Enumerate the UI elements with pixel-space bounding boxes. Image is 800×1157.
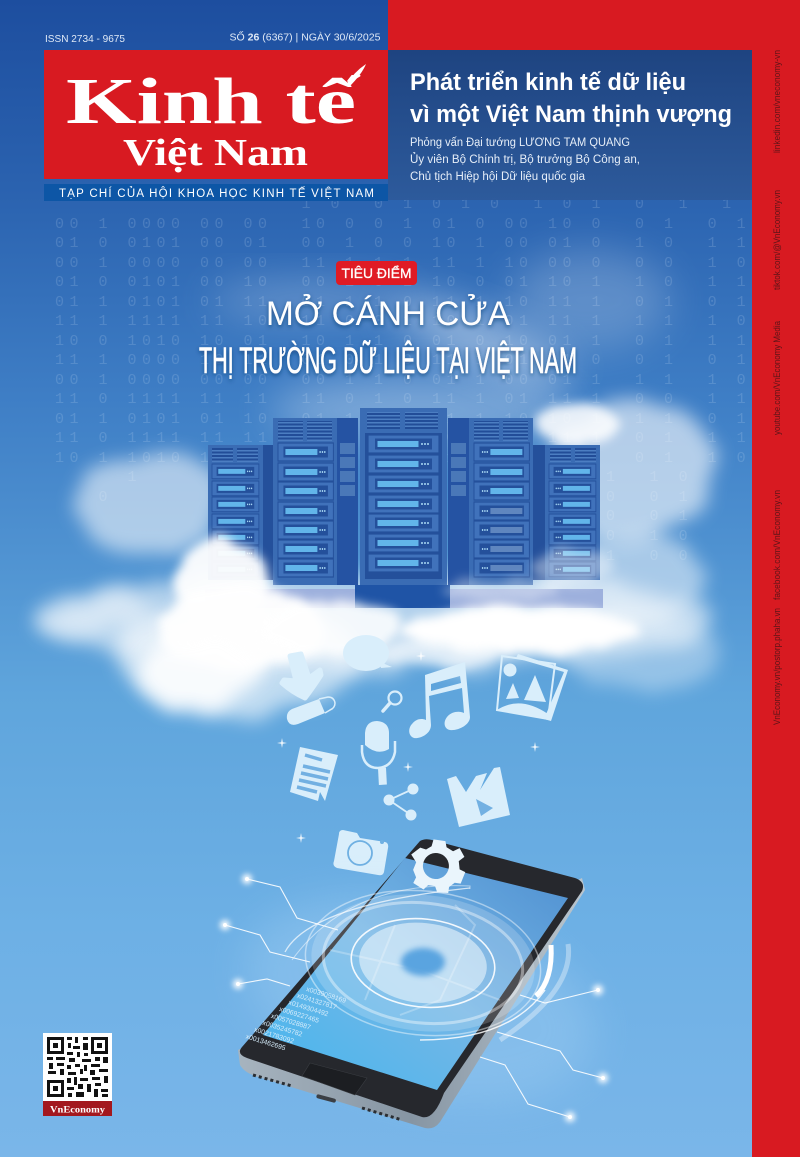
circuit lines with glowing nodes (220, 874, 608, 1122)
side strip social links: VnEconomy.vn/postorp.phaha.vn (772, 608, 783, 725)
qr code with VnEconomy label: VnEconomy (50, 1106, 105, 1116)
binary code rain background: 01 0 0101 00 01 00 1 0 0 10 1 00 01 0 1 0 1 1 (55, 235, 751, 252)
smartphone (222, 839, 618, 1138)
icon: photo stack (497, 654, 568, 721)
rack: inner left (273, 418, 358, 585)
phone screen hex code text: x0069227465 (278, 1006, 320, 1025)
tagline band (44, 184, 388, 201)
binary code rain background: 1 00 1 0 1 0 0 (55, 548, 693, 565)
icon: speech bubble (343, 635, 392, 671)
binary code rain background: 0 10 0 1 0 0 1 (55, 508, 693, 525)
icon: video clapper (447, 767, 510, 827)
logo accent flourish (346, 64, 366, 87)
masthead red logo block (44, 50, 388, 179)
clouds in front of the servers (135, 538, 640, 707)
masthead date line (45, 30, 381, 45)
main title (199, 295, 577, 381)
binary code rain background: 1 0 0 1 0 1 0 1 0 1 0 1 1 (55, 196, 737, 213)
logo: Kinh tế: Kinh tế (66, 65, 361, 138)
panel headline: vì một Việt Nam thịnh vượng (410, 101, 732, 128)
clouds behind the servers (40, 250, 720, 715)
binary code rain background: 10 0 1010 10 01 10 1 1 0 01 0 10 01 1 0 1 1 1 (55, 333, 751, 350)
side strip social links (772, 50, 783, 725)
phone body (240, 839, 583, 1117)
tag: Tiêu điểm: TIÊU ĐIỂM (342, 266, 412, 281)
binary code rain background: 00 1 0000 00 00 11 1 1 1 11 1 10 00 0 0 0 1 0 (55, 255, 751, 272)
main title: MỞ CÁNH CỬA (266, 295, 510, 333)
icon: share (384, 784, 418, 820)
phone screen hex code text (245, 973, 347, 1065)
icon: gear (406, 837, 469, 896)
binary code rain background: 00 1 0000 00 00 00 1 1 0 01 1 00 01 1 1 1 1 0 (55, 372, 751, 389)
masthead date line: ISSN 2734 - 9675 (45, 34, 125, 45)
tagline band: TẠP CHÍ CỦA HỘI KHOA HỌC KINH TẾ VIỆT NAM (59, 187, 374, 200)
phone shadow glow (222, 862, 618, 1138)
phone screen hex code text: x0057028887 (270, 1013, 312, 1032)
binary code rain background: 01 1 0101 01 10 01 1 0 1 01 1 10 10 1 1 1 0 1 (55, 411, 751, 428)
binary code rain background: 0 0 0 1 01 1 0 0 0 1 (55, 489, 693, 506)
phone screen hex code text: x0039058169 (305, 986, 347, 1005)
top red banner and side strip (388, 0, 800, 1157)
phone screen hex code text: x0021783092 (253, 1027, 295, 1045)
tag: Tiêu điểm (336, 261, 417, 285)
side strip social links: youtube.com/VnEconomy Media (772, 320, 783, 435)
binary code rain background: 01 0 0101 00 10 00 1 0 1 10 0 01 10 1 1 0 1 1 (55, 274, 751, 291)
panel: cover interview story (388, 50, 752, 200)
binary code rain background: 11 0 1111 11 11 11 0 0 1 10 1 01 11 1 0 1 1 1 (55, 430, 751, 447)
icon: download arrow (282, 654, 321, 698)
phone side edge (238, 878, 585, 1128)
binary code rain background: 11 0 1111 11 11 11 0 1 0 11 1 01 11 1 0 0 1 1 (55, 391, 751, 408)
phone screen hex code text: x0241327817 (296, 993, 338, 1011)
panel headline: Phát triển kinh tế dữ liệu (410, 69, 686, 96)
side strip social links: tiktok.com/@VnEconomy.vn (772, 190, 783, 290)
logo: Việt Nam: Việt Nam (123, 132, 308, 174)
qr code with VnEconomy label (43, 1033, 112, 1116)
binary code rain background: 1 1 1 0 10 0 1 1 1 0 (55, 469, 693, 486)
rack: far left (208, 445, 273, 580)
server racks (205, 408, 603, 608)
panel subtext: Chủ tịch Hiệp hội Dữ liệu quốc gia (410, 171, 586, 183)
rack: far right (533, 445, 600, 580)
icon: camera (333, 830, 388, 875)
floating data icons (282, 635, 568, 875)
icon: document (290, 747, 338, 801)
side strip social links: linkedin.com/vneconomy-vn (772, 50, 783, 153)
binary code rain background: 1 01 0 0 0 1 0 (55, 528, 693, 545)
icon: pill (287, 697, 335, 725)
binary code rain background: 11 1 1111 11 10 11 0 0 1 10 1 01 11 1 1 1 1 0 (55, 313, 751, 330)
icon: magnifier (383, 692, 402, 711)
phone screen hex code text: x0013462695 (245, 1033, 286, 1052)
icon: music note (409, 662, 470, 738)
rack: inner right (448, 418, 533, 585)
binary code rain background: 00 1 0000 00 00 10 0 0 1 01 0 00 10 0 0 1 0 1 (55, 216, 751, 233)
hud aperture graphic (285, 879, 569, 1047)
binary code rain background (55, 196, 751, 565)
rack: centre (360, 408, 447, 585)
sparkles (276, 637, 540, 868)
side strip social links: facebook.com/VnEconomy.vn (772, 490, 783, 600)
phone bottom details (253, 1063, 402, 1120)
panel subtext: Ủy viên Bộ Chính trị, Bộ trưởng Bộ Công an, (410, 153, 640, 166)
binary code rain background: 01 1 0101 01 11 01 1 1 0 11 1 10 11 1 0 1 0 1 (55, 294, 751, 311)
phone screen hex code text: x0149304492 (288, 1000, 329, 1018)
binary code rain background: 10 1 1010 10 11 10 0 1 0 11 0 10 10 1 0 1 1 0 (55, 450, 751, 467)
icon: microphone (362, 721, 395, 785)
server base platform (205, 585, 603, 608)
phone screen (263, 858, 568, 1090)
masthead date line: SỐ 26 (6367) | NGÀY 30/6/2025 (230, 30, 381, 44)
panel subtext: Phỏng vấn Đại tướng LƯƠNG TAM QUANG (410, 137, 630, 149)
phone screen hex code text: x0035245782 (262, 1020, 303, 1039)
binary code rain background: 11 1 0000 10 11 01 0 1 0 11 1 01 01 0 0 1 0 1 (55, 352, 751, 369)
